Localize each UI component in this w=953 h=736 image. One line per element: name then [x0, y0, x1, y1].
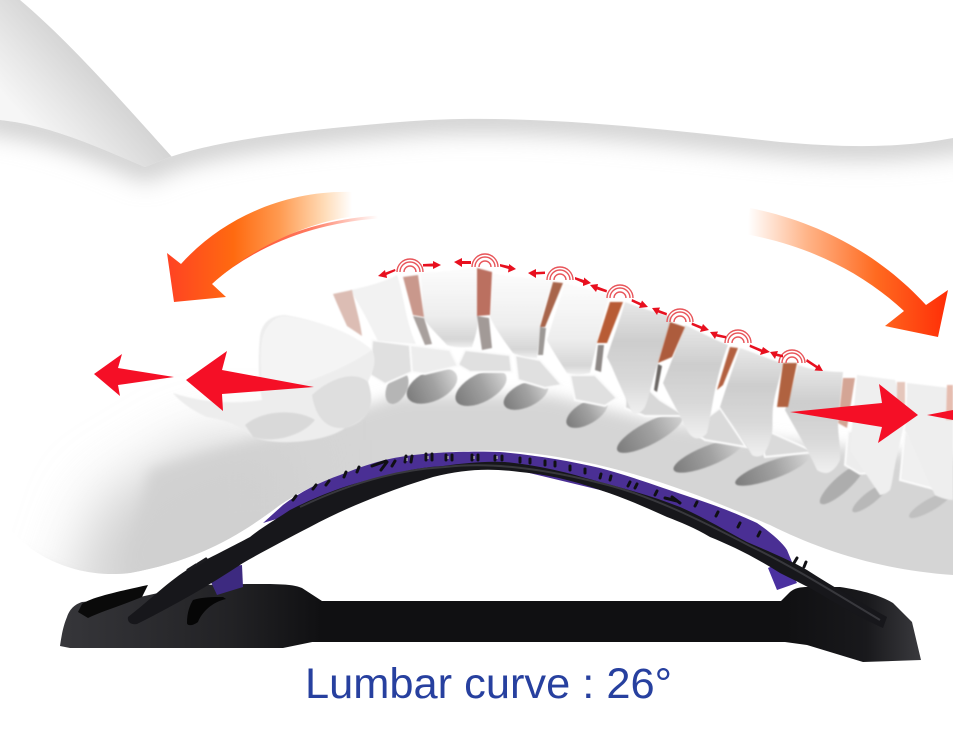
- small traction arrows along spine: [378, 258, 823, 371]
- sacrum: [173, 315, 375, 442]
- purple supports: [210, 565, 243, 595]
- red arrow: left large: [186, 351, 314, 411]
- pulse rings along spine: [397, 254, 805, 363]
- facets between vertebrae: [370, 340, 945, 492]
- spinous processes: [381, 361, 953, 522]
- caption: Lumbar curve : 26°: [305, 660, 672, 708]
- massage nubs: [293, 454, 806, 567]
- spine illustration: [173, 267, 953, 522]
- curved arrow: right orange: [745, 208, 948, 337]
- body silhouette: [0, 118, 953, 620]
- base right foot: [780, 587, 921, 662]
- board edge highlight: [300, 465, 880, 620]
- black arched board: [128, 462, 887, 628]
- red arrow: far right small: [927, 410, 953, 420]
- curved arrow: left orange: [167, 192, 378, 302]
- lumbar stretcher device: [60, 452, 921, 662]
- red arrow: far left small: [94, 354, 174, 396]
- nub highlights: [407, 456, 497, 461]
- base left foot: [60, 584, 322, 648]
- left adjuster knob: [78, 585, 148, 618]
- purple pad: [263, 452, 792, 562]
- left rear foot: [187, 597, 226, 625]
- base rail: [300, 601, 785, 642]
- vertebra bodies: [350, 267, 953, 500]
- discs: [333, 268, 953, 428]
- red arrow: right large: [790, 384, 918, 443]
- upper leg silhouette: [0, 0, 172, 168]
